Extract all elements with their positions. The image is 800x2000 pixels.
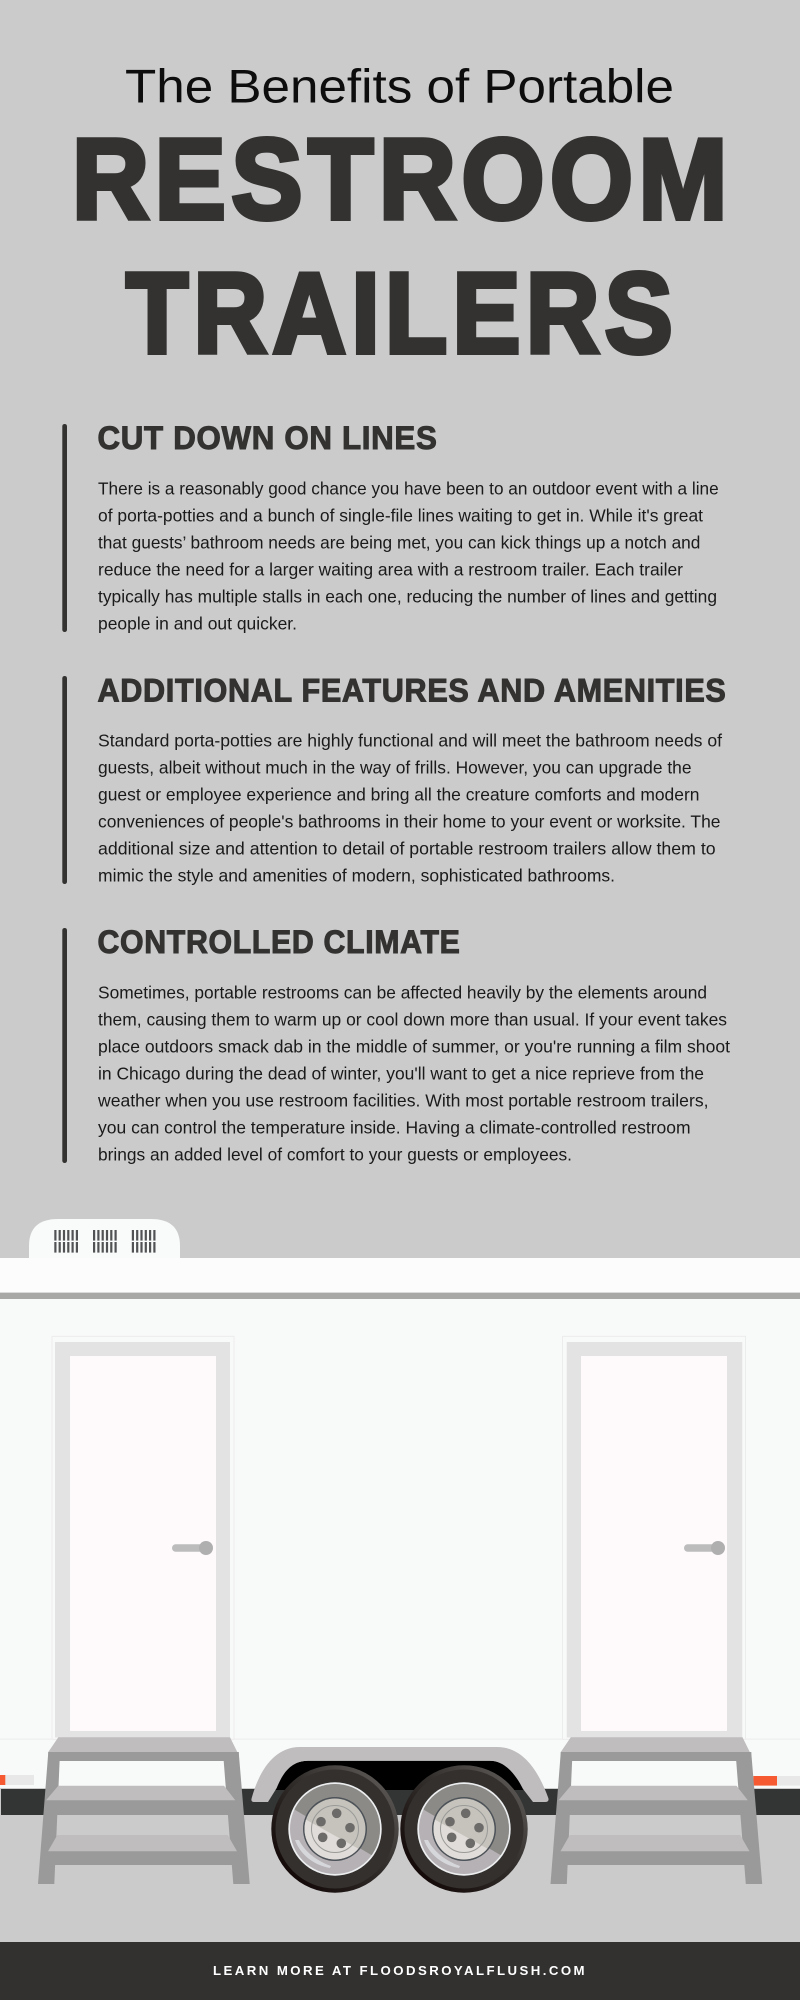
heading: CUT DOWN ON LINES (98, 420, 438, 456)
text block: mimic the style and amenities of modern, sophisticated bathrooms. (98, 865, 615, 885)
text block: that guests’ bathroom needs are being met, you can kick things up a notch and (98, 532, 700, 552)
accent bar (62, 424, 67, 632)
wheel right (400, 1765, 528, 1893)
text block: in Chicago during the dead of winter, you'll want to get a nice reprieve from the (98, 1063, 704, 1083)
text block: conveniences of people's bathrooms in their home to your event or worksite. The (98, 811, 720, 831)
text block: guest or employee experience and bring all the creature comforts and modern (98, 784, 700, 804)
text block (98, 478, 719, 633)
tail light right (753, 1776, 800, 1786)
chassis (1, 1789, 800, 1815)
text block: Standard porta-potties are highly functional and will meet the bathroom needs of (98, 730, 722, 750)
text block: typically has multiple stalls in each one, reducing the number of lines and getting (98, 586, 717, 606)
text block: them, causing them to warm up or cool down more than usual. If your event takes (98, 1009, 727, 1029)
title line: The Benefits of Portable: The Benefits of Portable (125, 61, 674, 114)
text block: you can control the temperature inside. Having a climate-controlled restroom (98, 1117, 691, 1137)
illustration: restroom trailer (0, 1219, 800, 1893)
accent bar (62, 676, 67, 884)
roof air conditioner unit (29, 1219, 180, 1258)
panel: cut down on lines (62, 420, 719, 633)
door left (52, 1336, 234, 1739)
wheel arch (274, 1761, 525, 1790)
text block: place outdoors smack dab in the middle of summer, or you're running a film shoot (98, 1036, 730, 1056)
text block: Sometimes, portable restrooms can be affected heavily by the elements around (98, 982, 707, 1002)
panel: controlled climate (62, 924, 730, 1164)
trailer body (0, 1258, 800, 1788)
text block (98, 730, 722, 885)
footer text: LEARN MORE AT FLOODSROYALFLUSH.COM (213, 1963, 587, 1978)
text block: brings an added level of comfort to your guests or employees. (98, 1144, 572, 1164)
text block: people in and out quicker. (98, 613, 297, 633)
tail light left (0, 1775, 34, 1785)
door handle (684, 1541, 725, 1555)
door right (562, 1336, 746, 1739)
panel: additional features and amenities (62, 672, 727, 885)
text block: additional size and attention to detail of portable restroom trailers allow them to (98, 838, 716, 858)
text block: reduce the need for a larger waiting area with a restroom trailer. Each trailer (98, 559, 683, 579)
text block: weather when you use restroom facilities. With most portable restroom trailers, (97, 1090, 709, 1110)
fender (251, 1747, 549, 1802)
accent bar (62, 928, 67, 1163)
title (72, 61, 733, 377)
text block: There is a reasonably good chance you have been to an outdoor event with a line (98, 478, 719, 498)
wheel left (271, 1765, 399, 1893)
text block: guests, albeit without much in the way of frills. However, you can upgrade the (98, 757, 692, 777)
heading: CONTROLLED CLIMATE (98, 924, 460, 960)
heading: ADDITIONAL FEATURES AND AMENITIES (98, 672, 726, 708)
title line: RESTROOM: RESTROOM (72, 117, 733, 244)
title line: TRAILERS: TRAILERS (126, 250, 678, 377)
text block: of porta-potties and a bunch of single-file lines waiting to get in. While it's great (98, 505, 703, 525)
door handle (172, 1541, 213, 1555)
steps right (550, 1737, 762, 1884)
footer bar (0, 1942, 800, 2000)
steps left (38, 1737, 250, 1884)
text block (97, 982, 730, 1164)
